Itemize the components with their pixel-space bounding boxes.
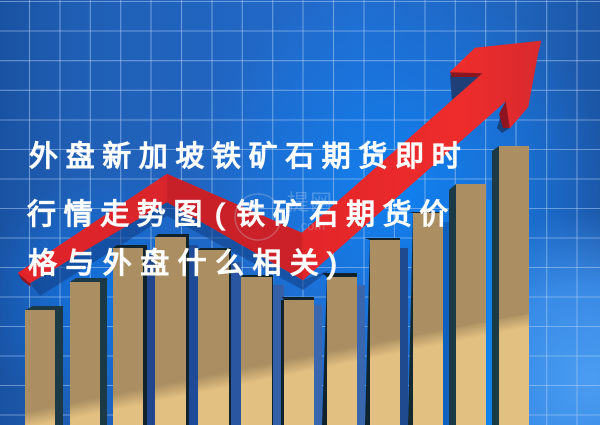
watermark xyxy=(235,190,333,240)
bar shadows on wall xyxy=(146,200,492,425)
arrow falling section shade xyxy=(167,174,303,280)
arrow body xyxy=(18,41,541,283)
arrow barb undersides xyxy=(450,72,483,77)
watermark: .com xyxy=(297,218,325,233)
title text xyxy=(26,140,468,280)
title line 2: 行情走势图(铁矿石期货价 xyxy=(27,199,456,231)
bar side faces xyxy=(25,146,499,425)
title line 1: 外盘新加坡铁矿石期货即时 xyxy=(29,141,468,173)
arrow tail underside xyxy=(18,273,31,287)
watermark: 提网 xyxy=(287,190,333,215)
bar fronts xyxy=(25,146,529,425)
red trend arrow xyxy=(18,41,541,287)
title line 3: 格与外盘什么相关) xyxy=(28,248,345,280)
arrow shadow on wall xyxy=(30,75,510,296)
bar chart xyxy=(25,146,529,425)
